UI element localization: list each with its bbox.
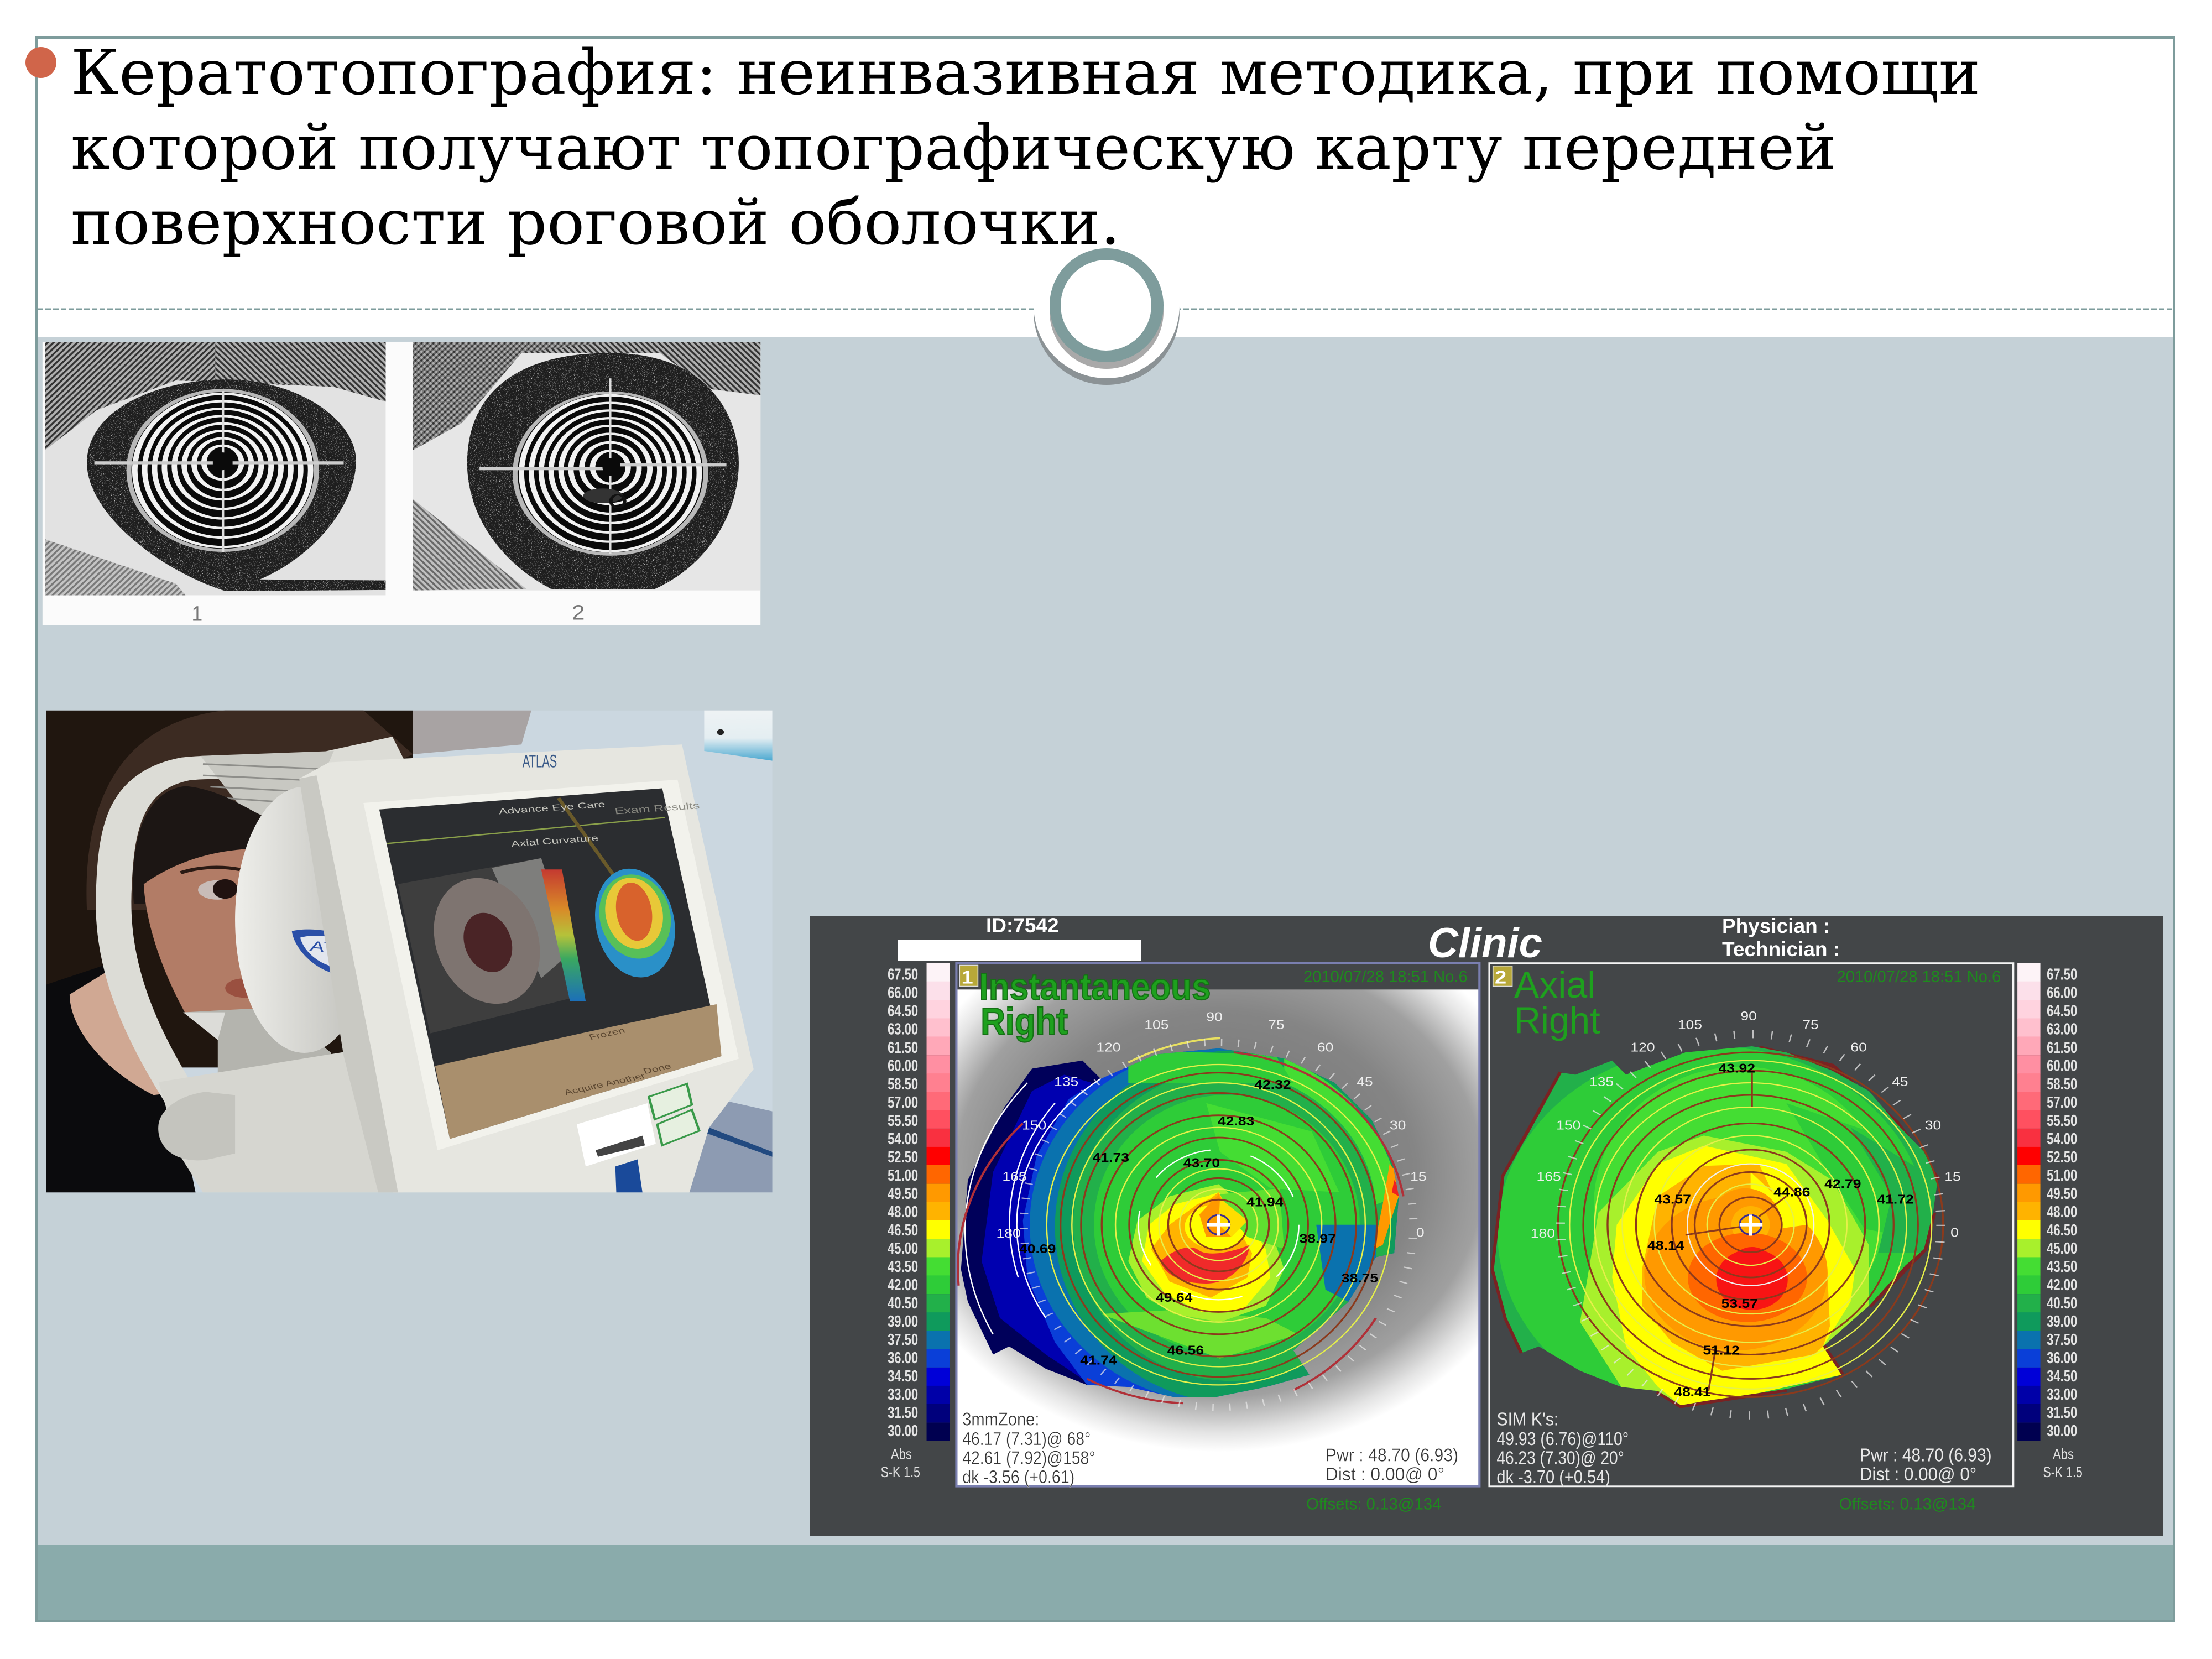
panel: axial right map: Offsets: 0.13@134 [1839,1495,1976,1513]
colour scale right: 64.50 [2047,1003,2077,1020]
map frame with eye photo: 2010/07/28 18:51 No.6 [1303,968,1468,986]
panel: instantaneous right map: Offsets: 0.13@134 [1306,1495,1442,1513]
colour scale right: 55.50 [2047,1112,2077,1129]
head rest frame [113,748,398,1105]
corneal map left: 45 [1357,1074,1373,1089]
colour scale left: 34.50 [888,1368,918,1385]
corneal map right: 60 [1850,1040,1867,1055]
colour scale right: 43.50 [2047,1258,2077,1276]
corneal map left: 150 [1022,1118,1046,1133]
colour scale right: 60.00 [2047,1057,2077,1074]
corneal map left: 41.74 [1080,1353,1117,1368]
colour scale left: 55.50 [888,1112,918,1129]
monitor body [299,744,754,1192]
colour scale right: S-K 1.5 [2043,1464,2083,1480]
colour scale left: 63.00 [888,1021,918,1038]
topography header text: ID:7542 [986,914,1059,937]
right eye [413,342,760,591]
colour scale left: 67.50 [888,966,918,983]
colour scale right: 45.00 [2047,1240,2077,1258]
corneal map left: 30 [1390,1118,1406,1133]
photo: patient at corneal topographer [46,711,773,1192]
panel: instantaneous right map [881,962,1481,1512]
corneal map right: 30 [1925,1118,1941,1133]
colour scale left: 58.50 [888,1076,918,1093]
image: keratoscopy rings on two eyes [43,342,760,625]
image: keratoscopy rings on two eyes: 2 [572,601,585,624]
corneal map left: 90 [1206,1010,1223,1024]
corneal map left [958,1010,1427,1407]
topography header text: Clinic [1428,920,1542,967]
corneal map right: 43.92 [1719,1061,1755,1076]
colour scale right: 58.50 [2047,1076,2077,1093]
left eye [45,342,385,595]
screen: Advance Eye Care [498,800,606,816]
corneal map right: 90 [1740,1009,1757,1024]
map badge and date: 2 [1495,966,1506,988]
sim K stats: 49.93 (6.76)@110° [1496,1428,1629,1449]
colour scale right: 67.50 [2047,966,2077,983]
colour scale left: 61.50 [888,1039,918,1056]
sim K stats: dk -3.70 (+0.54) [1496,1466,1610,1487]
screen [379,789,722,1139]
zone stats: dk -3.56 (+0.61) [962,1466,1074,1487]
zone stats: Dist : 0.00@ 0° [1326,1463,1444,1484]
colour scale left [881,963,950,1480]
background: dark wall and clothing [46,711,413,1067]
corneal map left: 15 [1410,1170,1427,1184]
labels on monitor [577,1103,656,1166]
base and knob [164,1052,378,1192]
corneal map right [1484,1009,1961,1420]
corneal map left: 60 [1317,1040,1333,1055]
colour scale right: 30.00 [2047,1422,2077,1440]
zone stats: 46.17 (7.31)@ 68° [962,1428,1091,1449]
instrument dome [235,787,340,1053]
colour scale right: 66.00 [2047,984,2077,1001]
map frame with eye photo [955,962,1481,1488]
corneal map left: 0 [1416,1225,1425,1240]
colour scale right: 52.50 [2047,1149,2077,1166]
map title: Right [1514,1000,1600,1042]
colour scale left: Abs [891,1446,912,1462]
colour scale right [2017,963,2083,1480]
corneal map right: 44.86 [1773,1185,1811,1199]
colour scale left: 43.50 [888,1258,918,1276]
face [133,786,274,904]
colour scale left: 36.00 [888,1349,918,1367]
image: keratoscopy rings on two eyes: 1 [191,602,202,625]
sim K stats [1496,1408,1992,1487]
colour scale right: 36.00 [2047,1349,2077,1367]
sim K stats: Dist : 0.00@ 0° [1860,1463,1976,1484]
topography panel background [810,916,2163,1536]
corneal map right: 51.12 [1703,1343,1740,1358]
colour scale right: 48.00 [2047,1203,2077,1221]
corneal map right: 120 [1630,1040,1655,1055]
colour scale left: 40.50 [888,1295,918,1312]
topography header text: Technician : [1722,938,1840,961]
colour scale left: 60.00 [888,1057,918,1074]
corneal map left: 105 [1144,1018,1169,1032]
colour scale left: 33.00 [888,1386,918,1404]
map badge and date: 2010/07/28 18:51 No.6 [1837,968,2001,986]
corneal map left: 38.97 [1300,1232,1336,1246]
corneal map right: 43.57 [1655,1192,1691,1207]
topography header text [898,914,1840,967]
map title: Axial [1514,964,1595,1006]
colour scale left: 64.50 [888,1003,918,1020]
centre marker [1740,1214,1762,1236]
screen: Exam Results [614,801,701,816]
colour scale left: 54.00 [888,1130,918,1147]
topography header text: Physician : [1722,915,1830,937]
corneal map right: 45 [1892,1074,1908,1089]
corneal map left: 40.69 [1019,1241,1056,1256]
colour scale left: 48.00 [888,1203,918,1221]
zone stats: 3mmZone: [962,1408,1039,1430]
corneal map right: 150 [1556,1118,1580,1133]
colour scale left: 49.50 [888,1185,918,1203]
corneal map left: 42.32 [1254,1077,1291,1092]
corneal map left: 46.56 [1167,1343,1204,1358]
screen: Acquire Another [563,1071,647,1097]
icon: bullet [25,47,56,78]
colour scale left: 52.50 [888,1149,918,1166]
colour scale right: 63.00 [2047,1021,2077,1038]
hair [86,711,413,910]
colour scale left: 66.00 [888,984,918,1001]
map title [1514,964,1600,1042]
corneal map right: 135 [1589,1074,1614,1089]
corneal map right: 0 [1950,1225,1959,1240]
map title [979,967,1211,1042]
zone stats [962,1408,1458,1487]
colour scale right: 46.50 [2047,1222,2077,1239]
corneal map left: 75 [1268,1018,1285,1032]
corneal map left: 41.94 [1246,1195,1284,1209]
panel: axial right map [1484,963,2083,1513]
corneal map right: 75 [1802,1018,1819,1032]
shirt and neck [46,964,196,1192]
title text [71,36,1980,259]
screen: Done [641,1062,672,1076]
sim K stats: Pwr : 48.70 (6.93) [1860,1444,1992,1465]
colour scale left: 46.50 [888,1222,918,1239]
corneal map left: 38.75 [1342,1271,1378,1285]
corneal map left: 135 [1054,1074,1078,1089]
chin rest [183,1008,331,1079]
map frame [1489,963,2013,1486]
corneal map right: 180 [1531,1227,1555,1241]
colour scale right: 33.00 [2047,1386,2077,1404]
corneal map right: 165 [1536,1170,1561,1184]
title text: Кератотопография: неинвазивная методика, при помощи [71,36,1980,109]
corneal map right: 42.79 [1824,1177,1861,1191]
colour scale right: 34.50 [2047,1368,2077,1385]
colour scale right: 40.50 [2047,1295,2077,1312]
map title: Instantaneous [979,967,1211,1008]
corneal map right: 48.14 [1647,1239,1684,1253]
colour scale right: 49.50 [2047,1185,2077,1203]
colour scale left: S-K 1.5 [881,1464,920,1480]
corneal map left: 42.83 [1218,1114,1254,1129]
photo: patient at corneal topographer: ATLAS [523,751,557,771]
colour scale left: 30.00 [888,1422,918,1440]
colour scale left: 31.50 [888,1404,918,1422]
map frame with eye photo: 1 [962,966,973,988]
colour scale left: 45.00 [888,1240,918,1258]
colour scale right: 31.50 [2047,1404,2077,1422]
zone stats: 42.61 (7.92)@158° [962,1447,1095,1468]
corneal map right: 53.57 [1721,1296,1758,1311]
colour scale right: 39.00 [2047,1313,2077,1331]
colour scale right: 51.00 [2047,1167,2077,1185]
map title: Right [980,1001,1068,1042]
title text: которой получают топографическую карту передней [71,111,1836,184]
colour scale right: 61.50 [2047,1039,2077,1056]
corneal map right: 15 [1944,1170,1961,1184]
colour scale right: 57.00 [2047,1094,2077,1111]
corneal map left: 43.70 [1183,1156,1220,1170]
corneal map left: 41.73 [1093,1150,1129,1165]
screen: Axial Curvature [510,833,599,849]
colour scale left: 39.00 [888,1313,918,1331]
title text: поверхности роговой оболочки. [71,186,1120,259]
corneal map right: 48.41 [1674,1385,1711,1400]
colour scale left: 57.00 [888,1094,918,1111]
zone stats: Pwr : 48.70 (6.93) [1326,1444,1458,1465]
centre marker [1207,1214,1230,1236]
colour scale right: Abs [2053,1446,2074,1462]
map badge and date [1493,966,2001,988]
colour scale left: 51.00 [888,1167,918,1185]
photo: patient at corneal topographer: ATL [309,938,349,958]
sim K stats: 46.23 (7.30)@ 20° [1496,1447,1624,1468]
colour scale right: 42.00 [2047,1276,2077,1294]
corneal map left: 49.64 [1156,1290,1192,1305]
colour scale right: 54.00 [2047,1130,2077,1147]
colour scale right: 37.50 [2047,1331,2077,1349]
screen: Frozen [587,1026,627,1041]
colour scale left: 42.00 [888,1276,918,1294]
icon: decorative circle [1034,232,1180,385]
corneal map right: 105 [1678,1018,1702,1032]
sim K stats: SIM K's: [1496,1408,1558,1430]
corneal map left: 120 [1096,1040,1121,1055]
corneal map left: 165 [1002,1170,1027,1184]
corneal map left: 180 [997,1227,1021,1241]
colour scale left: 37.50 [888,1331,918,1349]
corneal map right: 41.72 [1877,1192,1914,1207]
